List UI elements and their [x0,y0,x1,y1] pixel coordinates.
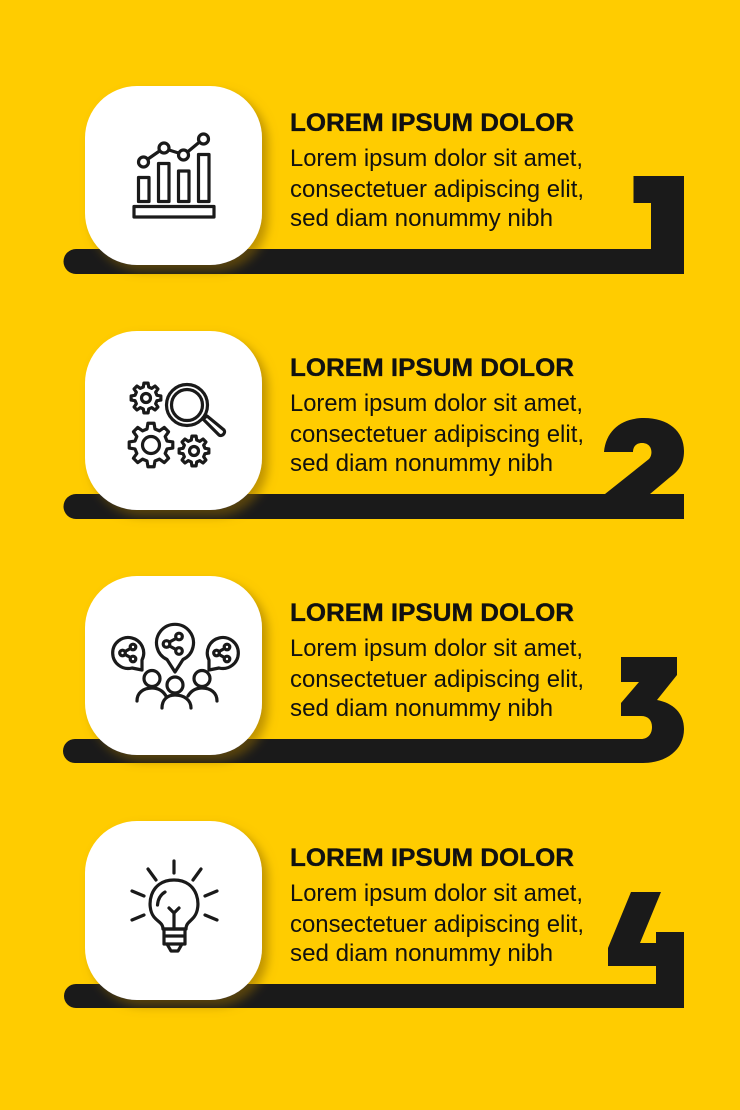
text block 1 [290,145,584,232]
text block 1: Lorem ipsum dolor sit amet, [290,145,583,172]
text block 4: sed diam nonummy nibh [290,940,553,967]
icon: gears and magnifier [129,383,225,467]
number 2 with baseline bar [64,418,684,519]
heading 2: LOREM IPSUM DOLOR [290,354,574,382]
card 4 [85,821,262,1000]
icon: light bulb [132,861,217,951]
panel: step 2 [64,331,684,519]
card 3 [85,576,262,755]
panel: step 4 [64,821,684,1008]
text block 2: consectetuer adipiscing elit, [290,421,584,448]
text block 3: consectetuer adipiscing elit, [290,666,584,693]
heading 3: LOREM IPSUM DOLOR [290,599,574,627]
text block 4: consectetuer adipiscing elit, [290,911,584,938]
text block 2: sed diam nonummy nibh [290,450,553,477]
card 1 [85,86,262,265]
text block 4: Lorem ipsum dolor sit amet, [290,880,583,907]
text block 2: Lorem ipsum dolor sit amet, [290,390,583,417]
number 1 with baseline bar [64,176,684,274]
number 4 with baseline bar [64,892,684,1008]
card 2 [85,331,262,510]
text block 3: Lorem ipsum dolor sit amet, [290,635,583,662]
text block 1: sed diam nonummy nibh [290,205,553,232]
text block 3 [290,635,584,722]
text block 4 [290,880,584,967]
text block 2 [290,390,584,477]
text block 3: sed diam nonummy nibh [290,695,553,722]
text block 1: consectetuer adipiscing elit, [290,176,584,203]
panel: step 1 [64,86,684,274]
heading 4: LOREM IPSUM DOLOR [290,844,574,872]
icon: team with share bubbles [113,624,238,708]
heading 1: LOREM IPSUM DOLOR [290,109,574,137]
icon: bar chart with trend line [134,134,214,217]
panel: step 3 [63,576,684,763]
number 3 with baseline bar [63,657,684,763]
